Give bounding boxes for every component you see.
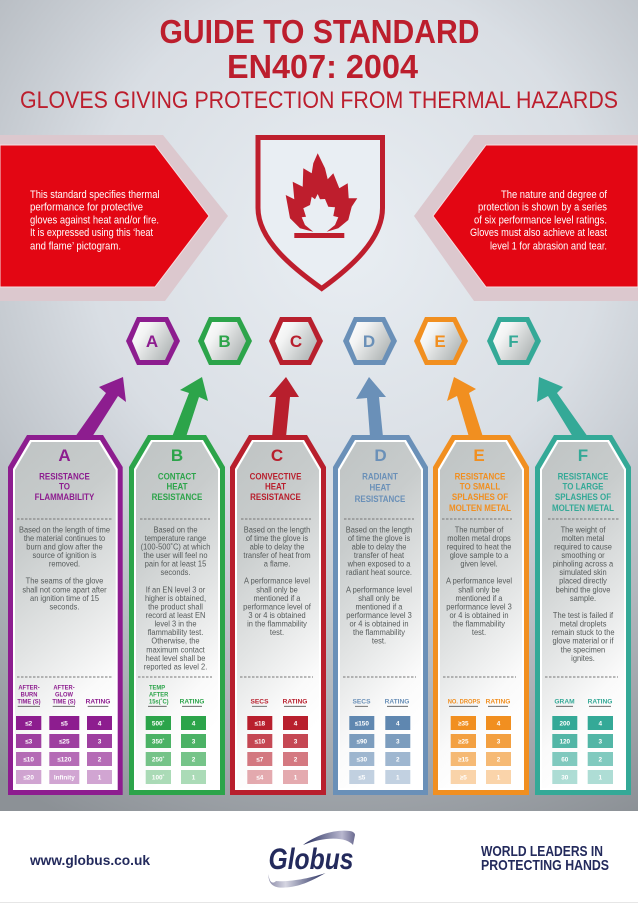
description B: If an EN level 3 or — [146, 585, 205, 594]
description D: shall only be — [358, 593, 400, 603]
heading F: RESISTANCE — [558, 471, 608, 482]
table A: RATING — [86, 698, 110, 706]
description D: Based on the length — [346, 525, 412, 534]
table A: ≤25 — [59, 738, 70, 746]
heading D: HEAT — [369, 482, 391, 493]
panel: E resistance to small splashes — [433, 435, 529, 795]
text: left intro — [30, 189, 160, 252]
hexagon badge F: F — [508, 332, 519, 351]
description E: A performance level — [446, 576, 512, 586]
table E: 1 — [497, 774, 501, 782]
text: left intro: This standard specifies thermal — [30, 189, 160, 201]
description C: mentioned if a — [254, 593, 301, 603]
table C: ≤10 — [254, 738, 266, 746]
icon: heat and flame shield — [258, 138, 382, 288]
table E: ≥35 — [458, 720, 469, 728]
heading B: CONTACT — [158, 471, 197, 482]
heading B: RESISTANCE — [152, 491, 202, 502]
table D: ≤90 — [356, 738, 368, 746]
heading F: SPLASHES OF — [555, 491, 612, 502]
text: right intro: of six performance level ratings. — [474, 214, 607, 226]
hexagon badge D — [343, 317, 397, 365]
description F: smoothing or — [561, 551, 605, 560]
table E: 4 — [497, 720, 501, 728]
description E: required to heat the — [447, 542, 512, 552]
hexagon badge F — [487, 317, 541, 365]
table C: ≤18 — [254, 720, 266, 728]
table D — [349, 698, 410, 784]
description B: maximum contact — [146, 645, 205, 654]
table D: RATING — [385, 698, 409, 706]
table B: 500˚ — [152, 720, 165, 728]
heading A: TO — [59, 481, 70, 492]
description C: 3 or 4 is obtained — [248, 611, 306, 620]
heading A: RESISTANCE — [39, 471, 90, 482]
table A: 3 — [98, 738, 102, 746]
description C: able to delay the — [250, 542, 305, 552]
description A: seconds. — [50, 602, 79, 612]
description E: glove sample to a — [450, 551, 509, 560]
table B: 250˚ — [152, 756, 165, 764]
table B: AFTER — [149, 691, 169, 698]
hexagon badge E — [414, 317, 468, 365]
description F: The test is failed if — [553, 611, 614, 620]
table A: Infinity — [54, 774, 75, 782]
text: right intro: protection is shown by a series — [478, 202, 607, 214]
heading E: TO SMALL — [460, 481, 501, 492]
table E: NO. DROPS — [448, 698, 480, 706]
description E: the flammability — [453, 619, 505, 629]
description B: heat level shall be — [146, 653, 206, 663]
description F: ignites. — [571, 653, 595, 663]
table D: ≤150 — [355, 720, 369, 728]
tagline: WORLD LEADERS IN — [481, 843, 603, 860]
panel: A resistance to flammability — [8, 435, 123, 795]
text: right intro: Gloves must also achieve at least — [470, 227, 607, 239]
description F: glove material or if — [552, 636, 614, 646]
table D: 1 — [396, 774, 400, 782]
table B: 1 — [192, 774, 196, 782]
table B: 350˚ — [152, 738, 165, 746]
description E: given level. — [460, 559, 498, 569]
table F: 120 — [559, 738, 571, 746]
table E — [448, 698, 511, 784]
heading D: RESISTANCE — [355, 493, 405, 504]
description A: removed. — [49, 559, 80, 569]
table A: GLOW — [55, 691, 73, 698]
text: left intro: performance for protective — [30, 202, 143, 214]
table A: TIME (S) — [52, 698, 76, 706]
description F: The weight of — [561, 525, 606, 534]
description E: or 4 is obtained in — [450, 611, 508, 620]
description B: (100-500˚C) at which — [141, 542, 210, 552]
table F: 200 — [559, 720, 571, 728]
description A: an ignition time of 15 — [30, 593, 99, 603]
panel: B contact heat resistance: B — [171, 446, 183, 465]
table A: ≤2 — [25, 720, 33, 728]
description B: Otherwise, the — [151, 636, 200, 646]
title — [20, 13, 618, 114]
description D: or 4 is obtained in — [350, 619, 408, 629]
description A: source of ignition is — [33, 551, 96, 560]
description F: remain stuck to the — [551, 628, 615, 637]
arrow F — [537, 377, 588, 437]
heading D: RADIANT — [362, 471, 398, 482]
description C: in the flammability — [247, 619, 307, 629]
panel: right intro — [414, 135, 638, 301]
table A: ≤3 — [25, 738, 33, 746]
table A: ≤10 — [23, 756, 34, 764]
panel: B contact heat resistance — [129, 435, 225, 795]
description D: when exposed to a — [347, 559, 411, 569]
arrow C — [269, 377, 299, 437]
table D: 3 — [396, 738, 400, 746]
table A: AFTER- — [18, 684, 40, 692]
table A — [16, 684, 112, 784]
description B: seconds. — [161, 568, 190, 577]
hexagon badge A: A — [146, 332, 158, 351]
table F: 1 — [599, 774, 603, 782]
description F: required to cause — [554, 542, 612, 552]
table F: 60 — [561, 756, 569, 764]
heading B: HEAT — [166, 481, 188, 492]
panel: D radiant heat resistance — [333, 435, 428, 795]
hexagon badge B — [198, 317, 252, 365]
description B: pain for at least 15 — [145, 559, 207, 569]
table A: AFTER- — [53, 684, 75, 692]
arrow B — [172, 377, 208, 437]
text: right intro — [470, 189, 608, 252]
logo: Globus — [268, 831, 355, 888]
table C: ≤4 — [256, 774, 264, 782]
description B: the product shall — [148, 602, 203, 612]
table A: ≤20 — [23, 774, 34, 782]
table D: 2 — [396, 756, 400, 764]
tagline — [481, 843, 609, 874]
website: www.globus.co.uk — [29, 852, 150, 868]
description D: mentioned if a — [356, 602, 403, 612]
description E: test. — [472, 628, 486, 637]
hexagon badge C: C — [290, 332, 302, 351]
heading E: RESISTANCE — [455, 471, 505, 482]
description B: temperature range — [145, 533, 207, 543]
table C: 2 — [294, 756, 298, 764]
table C: 4 — [294, 720, 298, 728]
table E: 2 — [497, 756, 501, 764]
text: left intro: It is expressed using this ‘heat — [30, 227, 153, 239]
table F: GRAM — [554, 698, 575, 706]
table F: 4 — [599, 720, 603, 728]
table B: RATING — [180, 698, 204, 706]
description A: The seams of the glove — [26, 576, 104, 586]
arrow A — [75, 377, 126, 437]
description D: able to delay the — [352, 542, 407, 552]
table C: SECS — [251, 698, 269, 706]
description F: simulated skin — [559, 568, 607, 577]
table B — [146, 684, 206, 784]
text: right intro: The nature and degree of — [501, 189, 608, 201]
heading C: CONVECTIVE — [250, 471, 301, 482]
heading E: SPLASHES OF — [452, 491, 509, 502]
table D: ≤5 — [358, 774, 366, 782]
table C: RATING — [283, 698, 307, 706]
description A: the material continues to — [24, 533, 106, 543]
table C: 3 — [294, 738, 298, 746]
table D: SECS — [353, 698, 371, 706]
table B: 2 — [192, 756, 196, 764]
description B: record at least EN — [146, 611, 206, 620]
panel: A resistance to flammability: A — [58, 446, 71, 465]
table F: RATING — [588, 698, 612, 706]
text: left intro: and flame’ pictogram. — [30, 240, 121, 252]
table A: ≤120 — [57, 756, 72, 764]
description F: metal droplets — [560, 619, 606, 629]
table F: 30 — [561, 774, 569, 782]
description E: mentioned if a — [456, 593, 503, 603]
description F: behind the glove — [556, 585, 611, 594]
panel: F resistance to large splashes: F — [578, 446, 588, 465]
table A: 1 — [98, 774, 102, 782]
table F: 2 — [599, 756, 603, 764]
heading F: TO LARGE — [563, 481, 604, 492]
table E: 3 — [497, 738, 501, 746]
description E: shall only be — [458, 585, 500, 594]
text: left intro: gloves against heat and/or fire. — [30, 214, 159, 226]
text: right intro: level 1 for abrasion and tear. — [490, 240, 607, 252]
description F: the specimen — [561, 645, 605, 654]
description D: radiant heat source. — [346, 568, 412, 577]
description B: reported as level 2. — [144, 662, 207, 672]
table A: ≤5 — [61, 720, 68, 728]
description C: of time the glove is — [246, 533, 308, 543]
description F: placed directly — [559, 576, 607, 586]
table F: 3 — [599, 738, 603, 746]
title: GUIDE TO STANDARD — [160, 13, 480, 50]
description C: transfer of heat from — [243, 551, 311, 560]
hexagon badge C — [269, 317, 323, 365]
description C: shall only be — [256, 585, 298, 594]
description A: Based on the length of time — [19, 525, 110, 534]
description F: sample. — [570, 593, 596, 603]
table E: ≥25 — [458, 738, 469, 746]
hexagon badge E: E — [434, 332, 446, 351]
table B: TEMP — [149, 684, 165, 692]
table B: 15s(˚C) — [149, 698, 169, 706]
description C: performance level of — [243, 602, 312, 612]
tagline: PROTECTING HANDS — [481, 857, 609, 874]
description C: test. — [270, 628, 284, 637]
description B: higher is obtained, — [145, 593, 206, 603]
panel: C convective heat resistance: C — [271, 446, 283, 465]
description D: performance level 3 — [346, 611, 412, 620]
description D: A performance level — [346, 585, 412, 594]
description B: Based on the — [153, 525, 198, 534]
description C: a flame. — [264, 559, 290, 569]
hexagon badge B: B — [218, 332, 231, 351]
panel: left intro — [0, 135, 228, 301]
table D: 4 — [396, 720, 400, 728]
table C: ≤7 — [256, 756, 264, 764]
panel: F resistance to large splashes — [535, 435, 631, 795]
heading A: FLAMMABILITY — [35, 491, 94, 502]
table A: 2 — [98, 756, 102, 764]
heading E: MOLTEN METAL — [449, 502, 512, 513]
table B: 3 — [192, 738, 196, 746]
description A: shall not come apart after — [22, 585, 107, 594]
description E: molten metal drops — [447, 533, 511, 543]
description E: performance level 3 — [446, 602, 512, 612]
description D: transfer of heat — [354, 551, 405, 560]
description D: the flammability — [353, 628, 405, 637]
table B: 4 — [192, 720, 196, 728]
panel: E resistance to small splashes: E — [473, 446, 485, 465]
table C: 1 — [294, 774, 298, 782]
panel: D radiant heat resistance: D — [374, 446, 387, 465]
hexagon badge A — [126, 317, 180, 365]
table A: TIME (S) — [17, 698, 41, 706]
description A: burn and glow after the — [26, 542, 103, 552]
hexagon badge D: D — [363, 332, 375, 351]
table B: 100˚ — [152, 774, 165, 782]
title: EN407: 2004 — [227, 48, 419, 85]
table A: BURN — [21, 691, 38, 698]
table A: 4 — [98, 720, 102, 728]
heading F: MOLTEN METAL — [552, 502, 615, 513]
table E: ≥15 — [458, 756, 469, 764]
arrow D — [356, 377, 386, 437]
table E: ≥5 — [460, 774, 467, 782]
panel: C convective heat resistance — [230, 435, 326, 795]
heading C: RESISTANCE — [250, 491, 301, 502]
table C — [247, 698, 308, 784]
description B: the user will feel no — [144, 551, 208, 560]
logo: Globus: Globus — [268, 843, 354, 876]
arrow E — [447, 377, 483, 437]
table D: ≤30 — [356, 756, 368, 764]
description E: The number of — [455, 525, 504, 534]
description C: A performance level — [244, 576, 310, 586]
description D: test. — [372, 636, 386, 646]
description F: pinholing across a — [553, 559, 614, 569]
description F: molten metal — [562, 533, 605, 543]
description B: level 3 in the — [155, 619, 197, 629]
description C: Based on the length — [244, 525, 310, 534]
footer — [0, 811, 638, 903]
description D: of time the glove is — [348, 533, 410, 543]
table E: RATING — [486, 698, 510, 706]
description B: flammability test. — [148, 628, 203, 637]
heading C: HEAT — [265, 481, 287, 492]
table F — [552, 698, 613, 784]
